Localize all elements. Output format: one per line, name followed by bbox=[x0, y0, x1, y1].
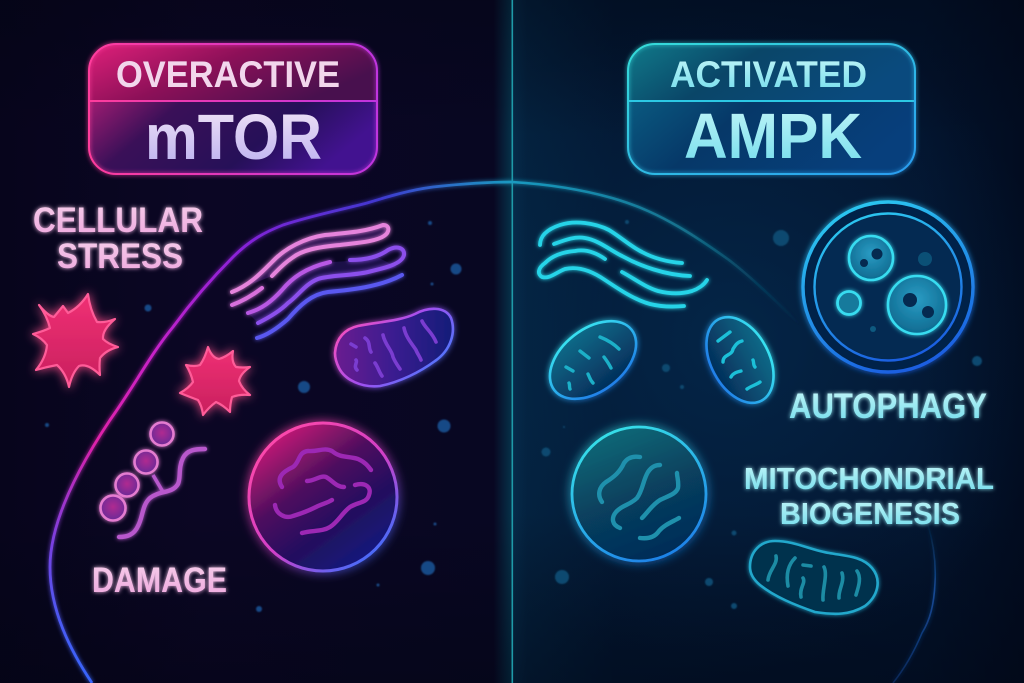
label: cellular stress: CELLULAR bbox=[33, 201, 203, 240]
label: mitochondrial biogenesis bbox=[744, 461, 994, 531]
icon: mitochondrion, lower blue bbox=[750, 541, 878, 614]
icon: endoplasmic reticulum, blue side bbox=[539, 223, 707, 307]
icon: mitochondrion, pink side bbox=[335, 309, 453, 386]
cell membrane outline bbox=[50, 182, 935, 683]
icon: endoplasmic reticulum, pink side bbox=[232, 225, 404, 338]
label: autophagy: AUTOPHAGY bbox=[789, 387, 987, 426]
icon: nucleus, pink side bbox=[249, 423, 397, 571]
icon: nucleus, blue side bbox=[572, 427, 706, 561]
icon: autophagosome bbox=[803, 202, 973, 372]
icon: mitochondrion, blue right bbox=[693, 306, 787, 414]
label: cellular stress bbox=[33, 201, 203, 276]
badge label: mTOR: mTOR bbox=[145, 101, 322, 173]
label: damage: DAMAGE bbox=[92, 561, 227, 600]
badge: overactive mTOR bbox=[89, 44, 377, 174]
label: mitochondrial biogenesis: BIOGENESIS bbox=[780, 496, 960, 531]
badge label: overactive: OVERACTIVE bbox=[116, 54, 340, 95]
badge: activated AMPK bbox=[628, 44, 915, 174]
icon: small stress burst bbox=[180, 347, 250, 415]
icon: damaged protein chain bbox=[100, 422, 205, 537]
icon: large stress burst bbox=[33, 294, 118, 387]
badge label: AMPK: AMPK bbox=[684, 100, 862, 172]
icon: mitochondrion, blue left bbox=[535, 305, 651, 415]
label: mitochondrial biogenesis: MITOCHONDRIAL bbox=[744, 461, 994, 496]
scattered vesicles bbox=[45, 220, 982, 612]
divider line bbox=[512, 0, 513, 683]
badge label: activated: ACTIVATED bbox=[670, 54, 867, 95]
label: cellular stress: STRESS bbox=[57, 237, 183, 276]
